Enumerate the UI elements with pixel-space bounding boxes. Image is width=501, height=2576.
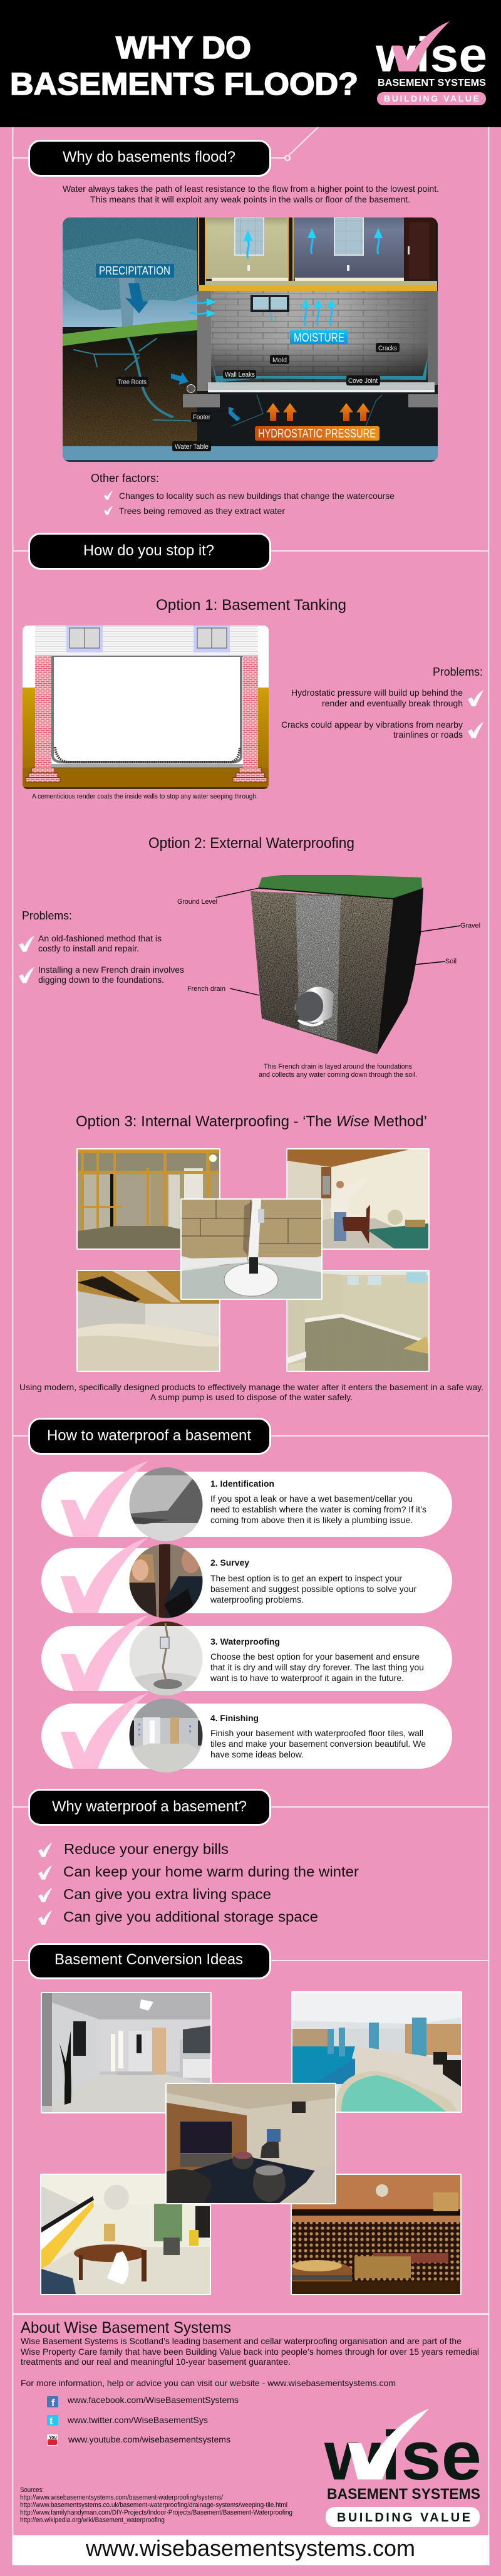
problems: option 1: Problems:	[433, 666, 483, 678]
caption: tanking: A cementicious render coats the inside walls to stop any water seeping through.	[32, 793, 258, 800]
right face	[377, 887, 423, 1054]
benefits list: Can give you additional storage space	[63, 1908, 318, 1925]
icon: check	[38, 1865, 52, 1880]
footer website bar	[13, 2535, 490, 2565]
label: ground level: Ground Level	[177, 898, 217, 906]
logo: Wise Basement Systems footer: wise	[324, 2417, 482, 2495]
social links	[47, 2395, 239, 2446]
front face	[250, 891, 393, 1054]
section heading: how do you stop it	[29, 534, 271, 569]
photo: sump pump in corner	[180, 1198, 323, 1300]
intro text: Water always takes the path of least resistance to the flow from a higher point to the lowest point.	[63, 184, 439, 194]
icon: check	[468, 722, 483, 738]
problems: option 1	[281, 666, 483, 740]
step 1: identification	[41, 1461, 452, 1542]
about section	[21, 2319, 479, 2388]
header band	[0, 0, 501, 127]
problems: option 1: Hydrostatic pressure will build up behind the	[291, 688, 463, 698]
photo: man fitting wall liner	[286, 1148, 430, 1250]
label: cove joint	[346, 375, 380, 385]
footings	[26, 768, 267, 782]
brick walls	[35, 656, 51, 768]
blue arrows	[171, 372, 240, 421]
icon: large check	[61, 1615, 148, 1691]
step 3: waterproofing: want is to have to waterproof it again in the future.	[210, 1673, 404, 1683]
label: mold	[270, 355, 289, 364]
section heading: how to waterproof a basement	[29, 1419, 271, 1454]
problems: option 2: An old-fashioned method that is	[38, 933, 162, 943]
photo: swimming pool conversion	[291, 1991, 462, 2113]
hydrostatic arrows	[266, 403, 370, 421]
section heading: why do basements flood	[29, 140, 271, 175]
label: footer: Footer	[193, 414, 210, 421]
label: gravel: Gravel	[460, 922, 480, 929]
photo: finished hallway circle	[129, 1698, 203, 1773]
title	[10, 30, 358, 102]
sources: http://www.basementsystems.co.uk/basement-waterproofing/drainage-systems/weeping-tile.html	[20, 2501, 287, 2509]
tree roots	[74, 338, 382, 461]
other factors: Changes to locality such as new buildings that change the watercourse	[119, 491, 395, 501]
option 3 description: A sump pump is used to dispose of the water safely.	[150, 1392, 353, 1402]
icon: twitter: t	[49, 2415, 53, 2427]
step 1: identification: coming from above then it is likely a plumbing issue.	[210, 1515, 413, 1525]
photo: insulated timber frame	[76, 1148, 220, 1250]
upper floor rooms	[197, 217, 438, 291]
section heading: why waterproof a basement	[29, 1790, 271, 1825]
step 2: survey: The best option is to get an expert to inspect your	[210, 1573, 402, 1583]
sources: http://www.familyhandyman.com/DIY-Projects/Indoor-Projects/Basement/Basement-Waterproofing	[20, 2509, 292, 2516]
intro text	[63, 184, 439, 204]
drain pipe	[187, 385, 195, 392]
logo: Wise Basement Systems header: BASEMENT SYSTEMS	[378, 78, 486, 88]
soil	[63, 335, 197, 446]
option 3 description	[19, 1382, 483, 1402]
icon: youtube: You	[49, 2436, 57, 2440]
step 4: finishing: have some ideas below.	[210, 1749, 304, 1759]
step 2: survey: basement and suggest possible options to solve your	[210, 1584, 416, 1594]
step 2: survey: waterproofing problems.	[210, 1594, 304, 1605]
gravel trench	[296, 895, 341, 1040]
footer website bar: www.wisebasementsystems.com	[85, 2535, 415, 2561]
moisture arrows	[189, 235, 379, 326]
social links: www.facebook.com/WiseBasementSystems	[67, 2395, 239, 2405]
footings	[183, 394, 220, 407]
logo: Wise Basement Systems footer: BUILDING VALUE	[337, 2511, 470, 2525]
step 4: finishing: Finish your basement with waterproofed floor tiles, wall	[210, 1728, 423, 1738]
windows	[66, 626, 230, 652]
problems: option 1: render and eventually break through	[322, 698, 463, 708]
callout lines	[215, 888, 460, 995]
icon: check	[19, 936, 34, 951]
icon: check	[38, 1910, 52, 1925]
step 1: identification: If you spot a leak or have a wet basement/cellar you	[210, 1494, 413, 1504]
sources	[20, 2486, 292, 2524]
benefits list	[38, 1841, 359, 1925]
about section: For more information, help or advice you can visit our website - www.wisebasementsystems.com	[21, 2378, 396, 2388]
heading: option 1: Option 1: Basement Tanking	[156, 597, 346, 614]
sources: Sources:	[20, 2486, 44, 2494]
step 1: identification: 1. Identification	[210, 1479, 274, 1489]
option 3 description: Using modern, specifically designed products to effectively manage the water after it enters the basement in a safe way.	[19, 1382, 483, 1392]
logo: Wise Basement Systems header	[375, 21, 487, 105]
heading: option 2: Option 2: External Waterproofing	[148, 835, 354, 852]
step 3: waterproofing: Choose the best option for your basement and ensure	[210, 1652, 420, 1662]
caption: french drain: and collects any water coming down through the soil.	[259, 1071, 417, 1079]
photo: wine cellar conversion	[291, 2174, 462, 2295]
problems: option 1: Cracks could appear by vibrations from nearby	[281, 720, 463, 730]
social links: www.twitter.com/WiseBasementSys	[67, 2415, 208, 2425]
step 2: survey	[41, 1537, 452, 1619]
title: WHY DO	[116, 30, 251, 65]
about section: Wise Property Care family that have been Building Value back into people’s homes through for over 15 years remedial	[21, 2347, 479, 2357]
about section: treatments and our real and meaningful 10-year basement guarantee.	[21, 2357, 291, 2367]
label: french drain: French drain	[187, 985, 225, 993]
photo: hallway conversion	[41, 1992, 212, 2113]
icon: check	[38, 1843, 52, 1857]
step 4: finishing: tiles and make your basement conversion beautiful. We	[210, 1739, 426, 1749]
label: mold: Mold	[272, 357, 287, 364]
step 1: identification: need to establish where the water is coming from? If it’s	[210, 1504, 426, 1514]
icon: large check	[61, 1693, 148, 1769]
intro text: This means that it will exploit any weak points in the walls or floor of the basement.	[90, 194, 410, 204]
problems: option 2: Problems:	[22, 909, 72, 922]
grass	[258, 875, 422, 899]
icon: check	[468, 690, 483, 706]
basement wall	[197, 291, 438, 391]
other factors	[91, 472, 395, 516]
benefits list: Reduce your energy bills	[64, 1841, 229, 1857]
icon: check	[104, 491, 113, 500]
icon: large check	[61, 1461, 148, 1537]
logo: Wise Basement Systems footer: BASEMENT SYSTEMS	[327, 2486, 480, 2503]
photo: plastic-lined crawl space	[76, 1270, 220, 1372]
step 4: finishing	[41, 1693, 452, 1773]
problems: option 1: trainlines or roads	[393, 730, 463, 740]
label: tree roots: Tree Roots	[118, 379, 147, 386]
label: cracks: Cracks	[378, 345, 397, 352]
logo: Wise Basement Systems header: wise	[375, 27, 487, 82]
photo: sump riser circle	[129, 1621, 203, 1696]
step 3: waterproofing	[41, 1615, 452, 1696]
water table	[63, 446, 438, 462]
label: cove joint: Cove Joint	[348, 377, 378, 385]
label: wall leaks: Wall Leaks	[225, 371, 255, 379]
label: moisture: MOISTURE	[294, 332, 344, 345]
photo: home cinema conversion	[165, 2083, 336, 2204]
photo: surveyor circle	[128, 1544, 203, 1619]
section heading: how to waterproof a basement: How to waterproof a basement	[47, 1427, 251, 1444]
sources: http://en.wikipedia.org/wiki/Basement_waterproofing	[20, 2516, 165, 2524]
step 3: waterproofing: 3. Waterproofing	[210, 1636, 280, 1647]
grass	[63, 320, 197, 346]
problems: option 2	[19, 909, 184, 985]
section heading: why do basements flood: Why do basements flood?	[63, 149, 235, 165]
problems: option 2: Installing a new French drain involves	[38, 965, 184, 975]
step 2: survey: 2. Survey	[210, 1558, 249, 1568]
sources: http://www.wisebasementsystems.com/basement-waterproofing/systems/	[20, 2494, 224, 2501]
diagram: basement tanking	[23, 626, 269, 789]
section heading: how do you stop it: How do you stop it?	[83, 542, 214, 559]
basement floor	[208, 382, 435, 390]
problems: option 2: digging down to the foundations.	[38, 975, 164, 985]
icon: youtube	[47, 2434, 58, 2446]
benefits list: Can keep your home warm during the winter	[63, 1863, 359, 1880]
photo: wet basement circle	[129, 1467, 203, 1542]
logo: Wise Basement Systems footer	[324, 2409, 482, 2527]
icon: check	[19, 967, 34, 983]
section heading: basement conversion ideas	[29, 1944, 271, 1978]
icon: facebook: f	[51, 2398, 55, 2409]
label: water table: Water Table	[175, 443, 209, 451]
icon: check	[38, 1888, 52, 1902]
diagram: why basements flood cross-section	[63, 217, 438, 462]
caption: french drain: This French drain is layed around the foundations	[264, 1063, 412, 1071]
logo: Wise Basement Systems header: BUILDING VALUE	[384, 93, 479, 103]
interior	[51, 657, 243, 768]
about section: Wise Basement Systems is Scotland’s leading basement and cellar waterproofing organisation and are part of the	[21, 2336, 462, 2346]
step 4: finishing: 4. Finishing	[210, 1713, 259, 1723]
caption: french drain	[259, 1063, 417, 1079]
section heading: why waterproof a basement: Why waterproof a basement?	[52, 1798, 247, 1815]
drain pipe	[292, 987, 334, 1025]
icon: twitter	[47, 2415, 58, 2427]
icon: large check	[61, 1537, 148, 1613]
step 3: waterproofing: that it is dry and will stay dry forever. The last thing you	[210, 1662, 424, 1672]
label: footer	[191, 412, 212, 422]
other factors: Trees being removed as they extract water	[119, 506, 285, 516]
photo: dining room conversion	[40, 2174, 211, 2295]
other factors: Other factors:	[91, 472, 159, 484]
siding	[35, 626, 258, 656]
icon: check	[104, 506, 113, 515]
problems: option 2: costly to install and repair.	[38, 943, 139, 953]
icon: facebook	[47, 2396, 58, 2409]
photo: finished waterproofed basement	[286, 1270, 430, 1372]
exterior rain and tree	[63, 217, 197, 327]
label: hydrostatic pressure: HYDROSTATIC PRESSURE	[258, 427, 376, 441]
title: BASEMENTS FLOOD?	[10, 66, 358, 102]
diagram: french drain cutaway block	[250, 875, 423, 1054]
label: soil: Soil	[445, 958, 457, 965]
social links: www.youtube.com/wisebasementsystems	[68, 2434, 230, 2444]
heading: option 3: Option 3: Internal Waterproofing - ‘The Wise Method’	[76, 1113, 427, 1130]
section heading: basement conversion ideas: Basement Conversion Ideas	[54, 1951, 243, 1968]
benefits list: Can give you extra living space	[63, 1886, 271, 1902]
about section: About Wise Basement Systems	[21, 2319, 231, 2337]
label: precipitation: PRECIPITATION	[99, 264, 170, 277]
label: tree roots	[116, 377, 148, 387]
